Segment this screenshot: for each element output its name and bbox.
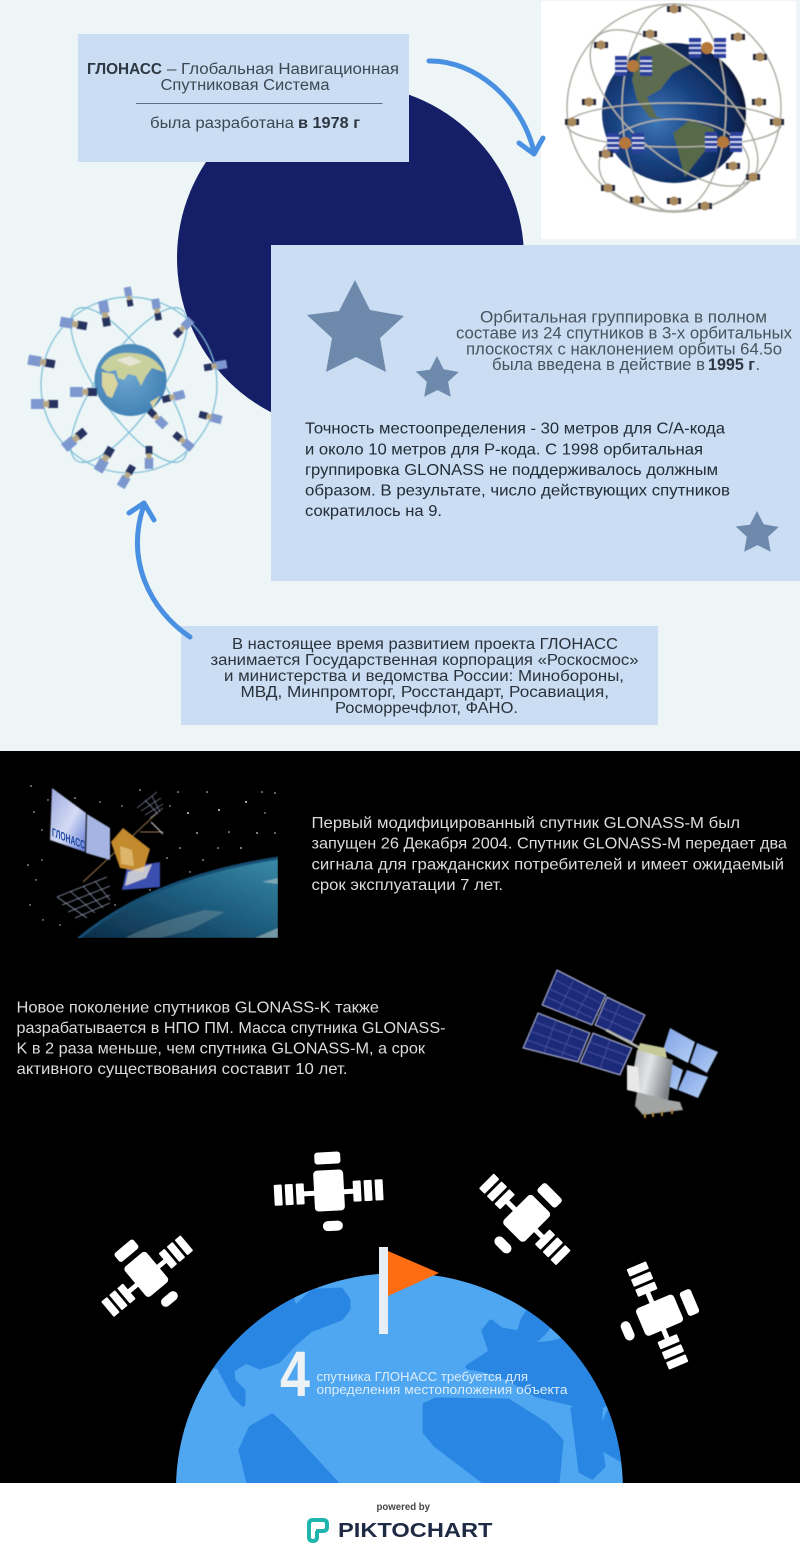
text: orbital group: плоскостях с наклонением орбиты 64.5о (466, 340, 782, 358)
footer: Piktochart logo: PIKTOCHART (338, 1520, 492, 1542)
text: GLONASS-K (16, 1000, 446, 1078)
light top background (0, 0, 800, 751)
heading text: ГЛОНАСС (87, 61, 162, 78)
text: agencies: МВД, Минпромторг, Росстандарт, Росавиация, (240, 684, 609, 701)
icon: large star (307, 280, 404, 372)
flag pole (379, 1247, 388, 1334)
date text: была разработана (150, 115, 294, 132)
icon: satellite left (83, 1213, 210, 1337)
text: agencies: В настоящее время развитием проекта ГЛОНАСС (232, 636, 618, 653)
panel: project development (181, 626, 658, 725)
text: GLONASS-K: Новое поколение спутников GLONASS-K также (16, 1000, 379, 1016)
text: orbital group (456, 308, 793, 374)
photo: satellite constellation around Earth (541, 1, 796, 239)
white footer background (0, 1483, 800, 1563)
big number 4: 4 (280, 1338, 310, 1410)
satellite panel label: ГЛОНАСС (52, 825, 85, 852)
text: positioning accuracy: и около 10 метров для Р-кода. С 1998 орбитальная (305, 442, 703, 458)
date text: в 1978 г (298, 115, 361, 132)
footer: Piktochart logo: powered by (376, 1501, 430, 1513)
text: GLONASS-K: K в 2 раза меньше, чем спутника GLONASS-M, а срок (16, 1040, 426, 1058)
text: GLONASS-K: активного существования составит 10 лет. (16, 1061, 348, 1078)
text: agencies: и министерства и ведомства России: Минобороны, (224, 668, 624, 685)
icon: corner star (736, 511, 779, 552)
arrow: bottom box to constellation (129, 503, 190, 637)
heading text (87, 61, 399, 94)
arrow: top box to globe photo (429, 61, 543, 154)
footer: Piktochart logo (309, 1501, 492, 1542)
illustration: Earth with flag and satellites (83, 1149, 716, 1490)
date text (150, 115, 361, 132)
text: GLONASS-K: разрабатывается в НПО ПМ. Масса спутника GLONASS- (16, 1020, 446, 1037)
text: GLONASS-M: срок эксплуатации 7 лет. (312, 877, 503, 894)
icon: satellite top (272, 1149, 385, 1234)
text: orbital group: составе из 24 спутников в 3-х орбитальных (456, 324, 793, 342)
caption: спутника ГЛОНАСС требуется для (316, 1369, 528, 1384)
globe (176, 1273, 640, 1490)
text: orbital group: была введена в действие в (492, 356, 705, 374)
text: GLONASS-M: сигнала для гражданских потребителей и имеет ожидаемый (312, 856, 784, 874)
text: GLONASS-M (312, 815, 787, 894)
icon: logo mark (309, 1520, 327, 1541)
panel: orbital group facts (271, 245, 800, 581)
caption (316, 1369, 568, 1397)
text: agencies: занимается Государственная корпорация «Роскосмос» (210, 652, 638, 669)
text: agencies (210, 636, 638, 717)
photo: GLONASS-K satellite (523, 970, 718, 1118)
text: positioning accuracy: образом. В результате, число действующих спутников (305, 482, 730, 500)
dark blue circle (177, 84, 524, 432)
text: positioning accuracy (305, 420, 730, 520)
text: positioning accuracy: Точность местоопределения - 30 метров для С/А-кода (305, 420, 725, 438)
diagram: orbital constellation (27, 286, 227, 489)
text: agencies: Росморречфлот, ФАНО. (335, 700, 518, 717)
text: orbital group: Орбитальная группировка в полном (480, 308, 767, 326)
heading text: Спутниковая Система (160, 77, 330, 94)
photo: GLONASS-M satellite over Earth (25, 785, 278, 939)
text: orbital group: 1995 г (708, 356, 755, 374)
text: positioning accuracy: сократилось на 9. (305, 503, 442, 520)
black lower background (0, 751, 800, 1483)
icon: satellite right (459, 1152, 592, 1285)
icon: small star (416, 356, 459, 397)
flag (388, 1251, 439, 1296)
text: GLONASS-M: запущен 26 Декабря 2004. Спутник GLONASS-M передает два (312, 836, 787, 852)
panel: GLONASS definition (78, 34, 409, 162)
text: orbital group: . (756, 356, 760, 374)
heading text: – Глобальная Навигационная (167, 61, 399, 78)
icon: satellite far right (601, 1250, 716, 1381)
text: positioning accuracy: группировка GLONASS не поддерживалось должным (305, 462, 718, 479)
caption: определения местоположения объекта (316, 1382, 568, 1397)
text: GLONASS-M: Первый модифицированный спутник GLONASS-M был (312, 815, 740, 832)
